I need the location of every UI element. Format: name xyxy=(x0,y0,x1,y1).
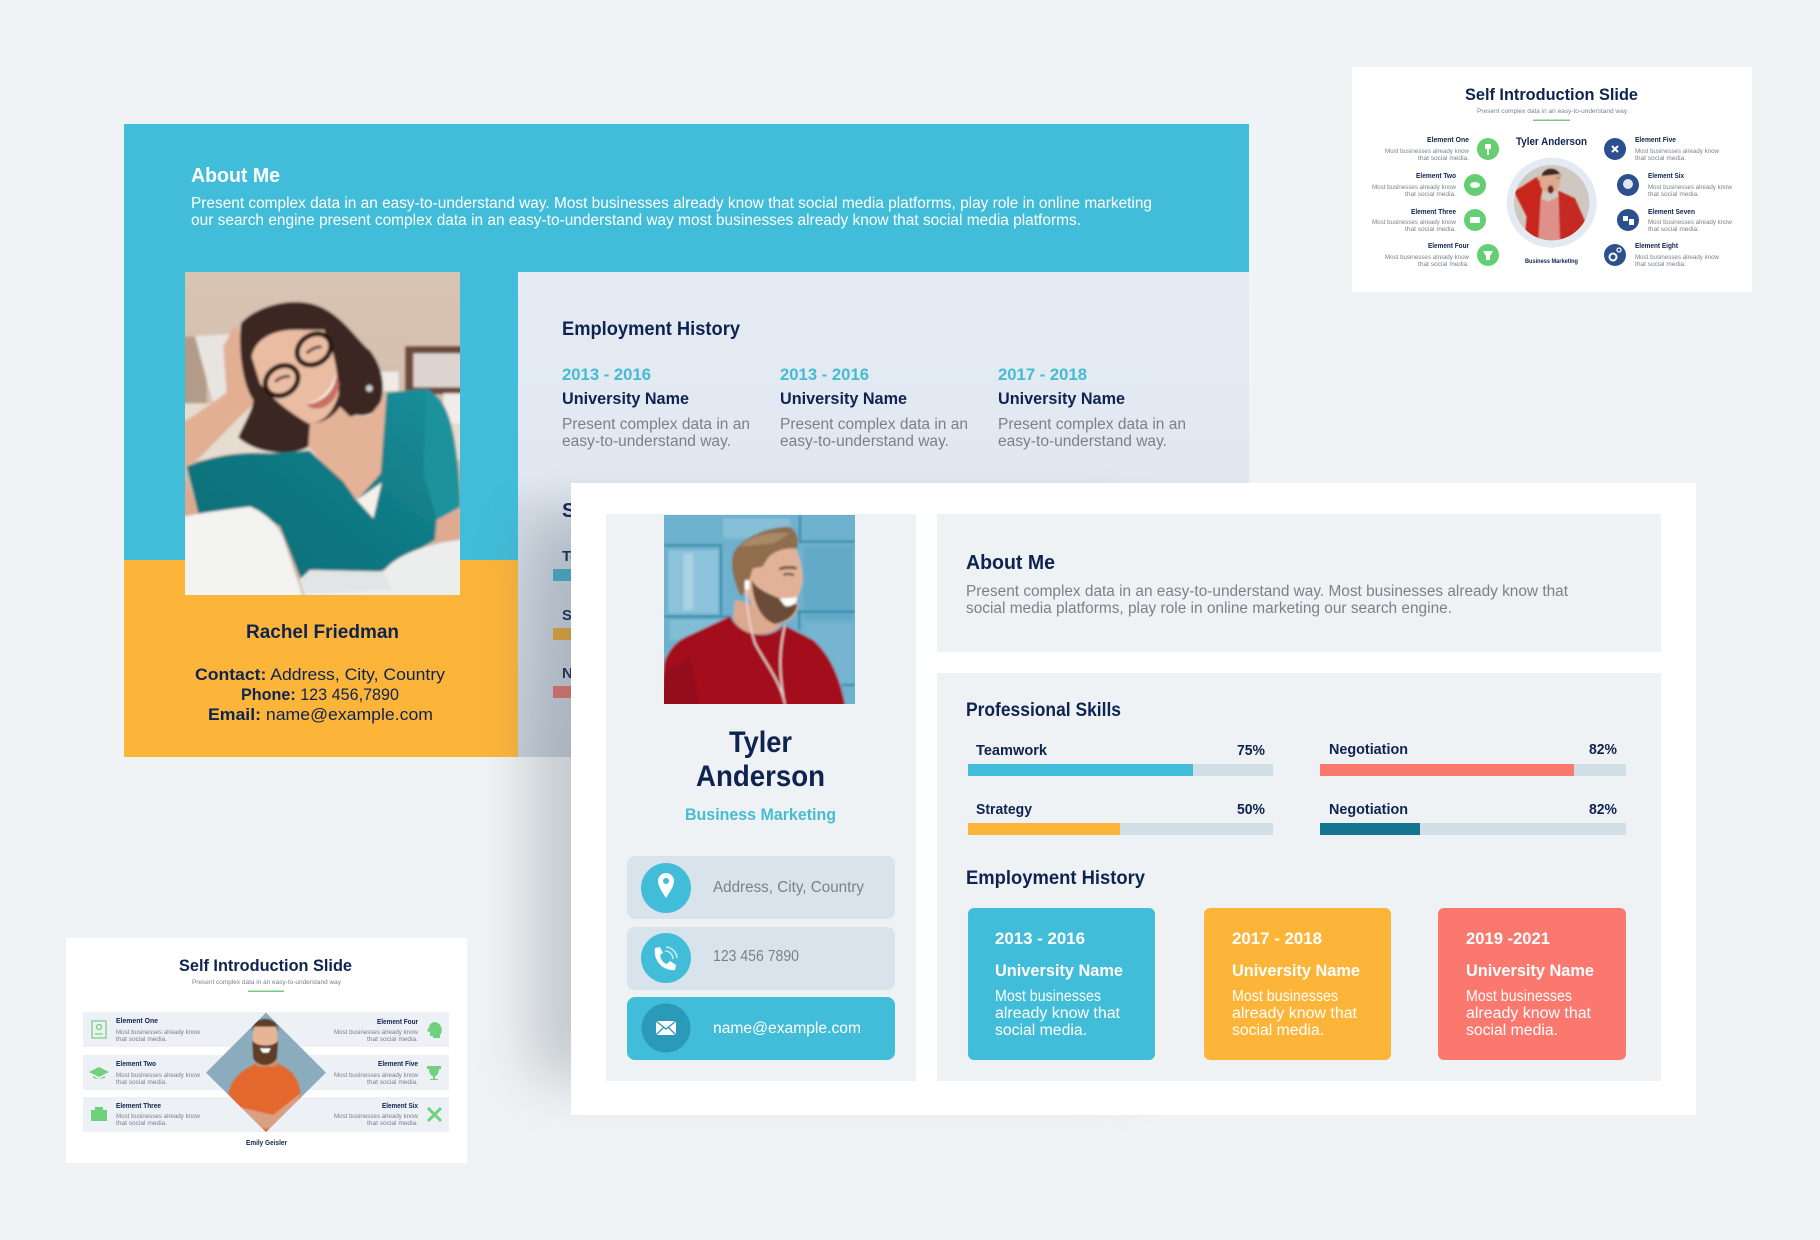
contact row: phone xyxy=(627,927,895,990)
card: 2013 - 2016 xyxy=(968,908,1155,1060)
employment column 2 xyxy=(780,365,968,450)
panel: skills and employment xyxy=(937,673,1661,1081)
card: 2013 - 2016: Most businesses xyxy=(995,988,1101,1005)
element four: that social media. xyxy=(367,1036,418,1043)
employment column 2: 2013 - 2016 xyxy=(780,365,869,384)
thumbnail subtitle: Present complex data in an easy-to-understand way xyxy=(192,979,342,986)
about me text: Present complex data in an easy-to-understand way. Most businesses already know that xyxy=(966,583,1569,600)
about me paragraph: Present complex data in an easy-to-understand way. Most businesses already know that social media platforms, play role in online marketing xyxy=(191,195,1152,212)
element five xyxy=(1604,137,1719,162)
element five xyxy=(334,1061,441,1086)
element four: Element Four xyxy=(377,1019,418,1026)
employment column 1: University Name xyxy=(562,389,689,408)
element four xyxy=(1385,243,1499,268)
icon: phone xyxy=(655,947,677,970)
slide: Rachel Friedman resume xyxy=(124,124,1249,757)
name: Tyler Anderson xyxy=(696,726,825,793)
element five: Element Five xyxy=(1635,137,1676,144)
icon: briefcase xyxy=(91,1107,107,1121)
slide: Tyler Anderson resume xyxy=(571,483,1696,1115)
photo: smiling woman with glasses reading xyxy=(180,267,467,600)
partly hidden skills section: Negotiation xyxy=(562,665,644,682)
circular portrait xyxy=(1507,158,1597,248)
contact row: email xyxy=(627,997,895,1060)
card: 2017 - 2018: social media. xyxy=(1232,1022,1324,1039)
orange contact panel xyxy=(124,560,518,757)
partly hidden skills section: Strategy xyxy=(562,607,623,624)
element three: that social media. xyxy=(116,1120,167,1127)
element one: Most businesses already know xyxy=(1385,148,1469,155)
element five: Element Five xyxy=(378,1061,418,1068)
skill: negotiation 82% dark teal xyxy=(1320,801,1626,835)
employment column 3: Present complex data in an xyxy=(998,416,1186,433)
employment column 2: University Name xyxy=(780,389,907,408)
employment column 2: Present complex data in an xyxy=(780,416,968,433)
card: 2017 - 2018: already know that xyxy=(1232,1005,1358,1022)
employment history heading: Employment History xyxy=(966,868,1145,889)
business marketing label: Business Marketing xyxy=(1525,258,1578,265)
skill: strategy 50% xyxy=(968,801,1273,835)
person name: Emily Geisler xyxy=(246,1138,287,1147)
element six xyxy=(334,1103,441,1127)
element one: that social media. xyxy=(1418,155,1469,162)
diamond portrait xyxy=(206,1013,326,1137)
employment column 1 xyxy=(562,365,750,450)
person name: Tyler Anderson xyxy=(1516,136,1587,148)
employment column 1: Present complex data in an xyxy=(562,416,750,433)
employment column 2: easy-to-understand way. xyxy=(780,433,949,450)
contact details xyxy=(195,665,446,724)
contact row: address: Address, City, Country xyxy=(713,879,864,896)
employment column 1: 2013 - 2016 xyxy=(562,365,651,384)
about me text: social media platforms, play role in online marketing our search engine. xyxy=(966,600,1452,617)
employment column 3: 2017 - 2018 xyxy=(998,365,1087,384)
element six: that social media. xyxy=(367,1120,418,1127)
card: 2017 - 2018: 2017 - 2018 xyxy=(1232,929,1322,948)
card: 2019 - 2021: social media. xyxy=(1466,1022,1558,1039)
element four: Most businesses already know xyxy=(1385,254,1469,261)
card: 2013 - 2016: social media. xyxy=(995,1022,1087,1039)
green underline xyxy=(248,990,284,992)
element three: Most businesses already know xyxy=(116,1113,200,1120)
skill: strategy 50%: 50% xyxy=(1237,801,1265,818)
green underline xyxy=(1533,120,1570,121)
partly hidden skills section xyxy=(553,500,644,698)
element one: Element One xyxy=(1427,137,1469,144)
element three: Element Three xyxy=(116,1103,161,1110)
element six: Element Six xyxy=(1648,173,1684,180)
element eight xyxy=(1604,243,1719,268)
icon: graduation cap xyxy=(89,1067,109,1079)
about me text xyxy=(966,583,1569,617)
skill: negotiation 82% coral: Negotiation xyxy=(1329,741,1408,758)
element one: Most businesses already know xyxy=(116,1029,200,1036)
skill: negotiation 82% coral xyxy=(1320,741,1626,776)
element two: Most businesses already know xyxy=(1372,184,1456,191)
contact details: Contact: Address, City, Country xyxy=(195,665,446,684)
element three: Element Three xyxy=(1411,209,1456,216)
element five: Most businesses already know xyxy=(1635,148,1719,155)
element three xyxy=(1372,209,1486,233)
partly hidden skills section: Skills xyxy=(562,500,614,522)
element two: Most businesses already know xyxy=(116,1072,200,1079)
skill: teamwork 75%: Teamwork xyxy=(976,742,1048,759)
skill: negotiation 82% dark teal: Negotiation xyxy=(1329,801,1408,818)
contact details: Phone: 123 456,7890 xyxy=(241,685,399,704)
card: 2017 - 2018: University Name xyxy=(1232,961,1360,980)
element three xyxy=(91,1103,200,1127)
professional skills heading: Professional Skills xyxy=(966,700,1121,721)
skill: teamwork 75%: 75% xyxy=(1237,742,1265,759)
element one: that social media. xyxy=(116,1036,167,1043)
icon: location pin xyxy=(658,873,674,898)
thumbnail title: Self Introduction Slide xyxy=(1465,85,1638,104)
name: Tyler Anderson: Anderson xyxy=(696,760,825,793)
panel: profile xyxy=(606,512,916,1081)
partly hidden skills section: Teamwork xyxy=(562,548,636,565)
element two: that social media. xyxy=(116,1079,167,1086)
element eight: Most businesses already know xyxy=(1635,254,1719,261)
card: 2019 - 2021 xyxy=(1438,908,1626,1060)
card: 2013 - 2016: University Name xyxy=(995,961,1123,980)
white slide background xyxy=(571,483,1696,1115)
element four: Element Four xyxy=(1428,243,1469,250)
thumbnail background xyxy=(1352,67,1752,292)
employment column 3: easy-to-understand way. xyxy=(998,433,1167,450)
card: 2017 - 2018: Most businesses xyxy=(1232,988,1338,1005)
employment history heading: Employment History xyxy=(562,319,740,340)
thumbnail slide: top right, circular layout xyxy=(1352,67,1752,292)
skill: negotiation 82% coral: 82% xyxy=(1589,741,1617,758)
element five: that social media. xyxy=(367,1079,418,1086)
element four: Most businesses already know xyxy=(334,1029,418,1036)
element eight: that social media. xyxy=(1635,261,1686,268)
about me paragraph xyxy=(191,195,1152,229)
icon: head with heart xyxy=(427,1022,442,1038)
contact row: address xyxy=(627,856,895,919)
element two: Element Two xyxy=(1416,173,1456,180)
element three: Most businesses already know xyxy=(1372,219,1456,226)
element two: Element Two xyxy=(116,1061,156,1068)
card: 2019 - 2021: already know that xyxy=(1466,1005,1592,1022)
element seven xyxy=(1617,209,1732,233)
card: 2019 - 2021: Most businesses xyxy=(1466,988,1572,1005)
icon: envelope xyxy=(656,1021,676,1035)
card: 2013 - 2016: 2013 - 2016 xyxy=(995,929,1085,948)
photo: man in red shirt xyxy=(660,512,860,708)
element one xyxy=(1385,137,1499,162)
contact row: email: name@example.com xyxy=(713,1020,861,1037)
thumbnail background xyxy=(66,938,467,1163)
element two: that social media. xyxy=(1405,191,1456,198)
skill: negotiation 82% dark teal: 82% xyxy=(1589,801,1617,818)
thumbnail title: Self Introduction Slide xyxy=(179,956,352,975)
element seven: that social media. xyxy=(1648,226,1699,233)
card: 2019 - 2021: University Name xyxy=(1466,961,1594,980)
element one: Element One xyxy=(116,1018,158,1025)
element seven: Element Seven xyxy=(1648,209,1695,216)
row backgrounds xyxy=(83,1012,449,1132)
thumbnail slide: bottom left, diamond layout xyxy=(66,938,467,1163)
employment column 3 xyxy=(998,365,1186,450)
name: Rachel Friedman: Rachel Friedman xyxy=(246,622,399,643)
teal header background xyxy=(124,124,1249,560)
element eight: Element Eight xyxy=(1635,243,1679,250)
icon: crossed tools xyxy=(428,1108,441,1121)
about me paragraph: our search engine present complex data in an easy-to-understand way most businesses already know that social media platforms. xyxy=(191,212,1081,229)
about me heading: About Me xyxy=(966,552,1055,574)
element six xyxy=(1617,173,1732,198)
icon: profile card xyxy=(92,1021,106,1038)
light employment panel xyxy=(518,272,1249,757)
job title: Business Marketing xyxy=(685,805,836,824)
element two xyxy=(1372,173,1486,198)
element six: Most businesses already know xyxy=(334,1113,418,1120)
element six: that social media. xyxy=(1648,191,1699,198)
element seven: Most businesses already know xyxy=(1648,219,1732,226)
thumbnail subtitle: Present complex data in an easy-to-understand way xyxy=(1477,108,1628,115)
element two xyxy=(89,1061,200,1086)
element six: Element Six xyxy=(382,1103,418,1110)
employment column 1: easy-to-understand way. xyxy=(562,433,731,450)
element one xyxy=(92,1018,200,1043)
element four xyxy=(334,1019,442,1043)
element four: that social media. xyxy=(1418,261,1469,268)
panel: about me xyxy=(937,514,1661,652)
element five: Most businesses already know xyxy=(334,1072,418,1079)
element five: that social media. xyxy=(1635,155,1686,162)
soft shadow under white slide xyxy=(530,520,1130,1080)
employment column 3: University Name xyxy=(998,389,1125,408)
card: 2017 - 2018 xyxy=(1204,908,1391,1060)
element six: Most businesses already know xyxy=(1648,184,1732,191)
contact details: Email: name@example.com xyxy=(208,705,433,724)
contact row: phone: 123 456 7890 xyxy=(713,948,799,965)
card: 2019 - 2021: 2019 -2021 xyxy=(1466,929,1550,948)
about me heading: About Me xyxy=(191,165,280,187)
skill: strategy 50%: Strategy xyxy=(976,801,1033,818)
name: Tyler Anderson: Tyler xyxy=(729,726,792,759)
icon: trophy xyxy=(427,1066,441,1080)
skill: teamwork 75% xyxy=(968,742,1273,776)
element three: that social media. xyxy=(1405,226,1456,233)
card: 2013 - 2016: already know that xyxy=(995,1005,1121,1022)
